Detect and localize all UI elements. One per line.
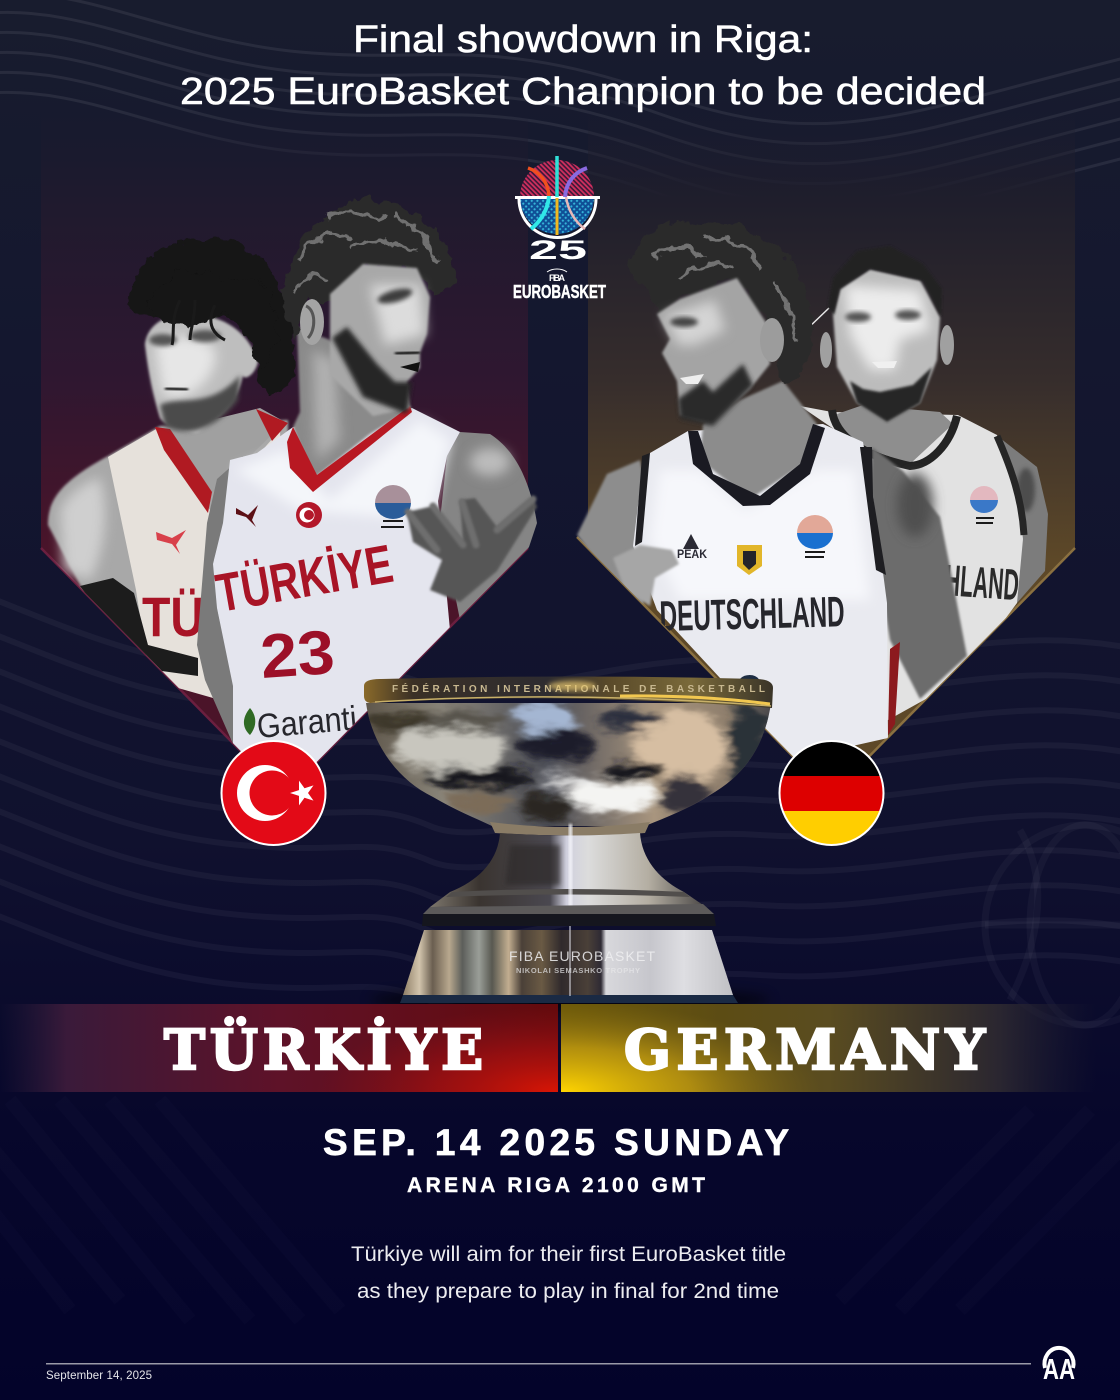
trophy rim: FÉDÉRATION INTERNATIONALE DE BASKETBALL xyxy=(392,682,768,695)
match date: SEP. 14 2025 SUNDAY xyxy=(323,1122,789,1163)
footer xyxy=(46,1348,1075,1386)
trophy neck xyxy=(490,822,650,836)
jersey tournament badge xyxy=(797,515,833,557)
logo: FIBA EuroBasket 25 xyxy=(513,155,606,302)
title: 2025 EuroBasket Champion to be decided xyxy=(180,71,986,113)
logo: AA xyxy=(1043,1348,1075,1386)
front player: 9 xyxy=(736,665,764,721)
panel: Türkiye xyxy=(40,154,538,764)
jersey logo PEAK: PEAK xyxy=(677,547,707,561)
front player xyxy=(577,222,967,760)
panel: Germany xyxy=(576,154,1076,758)
jersey lettering: DEUTSCHLAND xyxy=(659,588,845,641)
players: Germany xyxy=(577,222,1048,760)
trophy: NIKOLAI SEMASHKO TROPHY xyxy=(516,966,640,975)
flag: Germany xyxy=(779,741,885,846)
trophy shadow xyxy=(370,988,770,1012)
team banner: Germany xyxy=(561,1004,1096,1092)
title xyxy=(180,19,986,113)
front player: 23 xyxy=(258,618,337,692)
jersey crest xyxy=(737,545,762,575)
fist xyxy=(613,545,679,606)
back player: HLAND xyxy=(943,556,1021,610)
trophy rim xyxy=(364,676,773,708)
team name: GERMANY xyxy=(624,1017,986,1082)
description: Türkiye will aim for their first EuroBasket title xyxy=(351,1243,786,1266)
logo: AA: AA xyxy=(1043,1354,1075,1386)
trophy base xyxy=(403,930,733,995)
sponsor text: Garanti xyxy=(255,699,358,746)
trophy xyxy=(360,676,780,1003)
trophy bowl xyxy=(360,700,780,830)
description: as they prepare to play in final for 2nd time xyxy=(357,1280,779,1303)
back player xyxy=(800,246,1048,730)
jersey tournament badge xyxy=(970,486,998,523)
team banner: Türkiye xyxy=(0,1004,558,1092)
venue and time: ARENA RIGA 2100 GMT xyxy=(407,1174,705,1197)
jersey tournament badge xyxy=(375,485,411,527)
team name: TÜRKİYE xyxy=(164,1017,483,1082)
players: Türkiye xyxy=(48,198,537,770)
logo wordmark: FIBA xyxy=(549,273,566,283)
flag: Türkiye xyxy=(222,741,326,845)
jersey crest xyxy=(296,502,322,528)
front player xyxy=(197,198,537,770)
trophy pedestal xyxy=(430,833,703,907)
description xyxy=(351,1243,786,1303)
back player xyxy=(48,238,294,720)
jersey lettering: TÜ xyxy=(142,585,204,648)
logo numerals: 25 xyxy=(529,235,587,265)
jersey logo PEAK xyxy=(678,534,707,558)
trophy collar band xyxy=(422,914,716,926)
date: September 14, 2025 xyxy=(46,1370,152,1382)
title: Final showdown in Riga: xyxy=(353,19,813,61)
trophy inscription: FIBA EUROBASKET xyxy=(509,948,657,964)
logo: FIBA EuroBasket 25: EUROBASKET xyxy=(513,282,606,302)
jersey lettering: TÜRKİYE xyxy=(212,534,397,624)
